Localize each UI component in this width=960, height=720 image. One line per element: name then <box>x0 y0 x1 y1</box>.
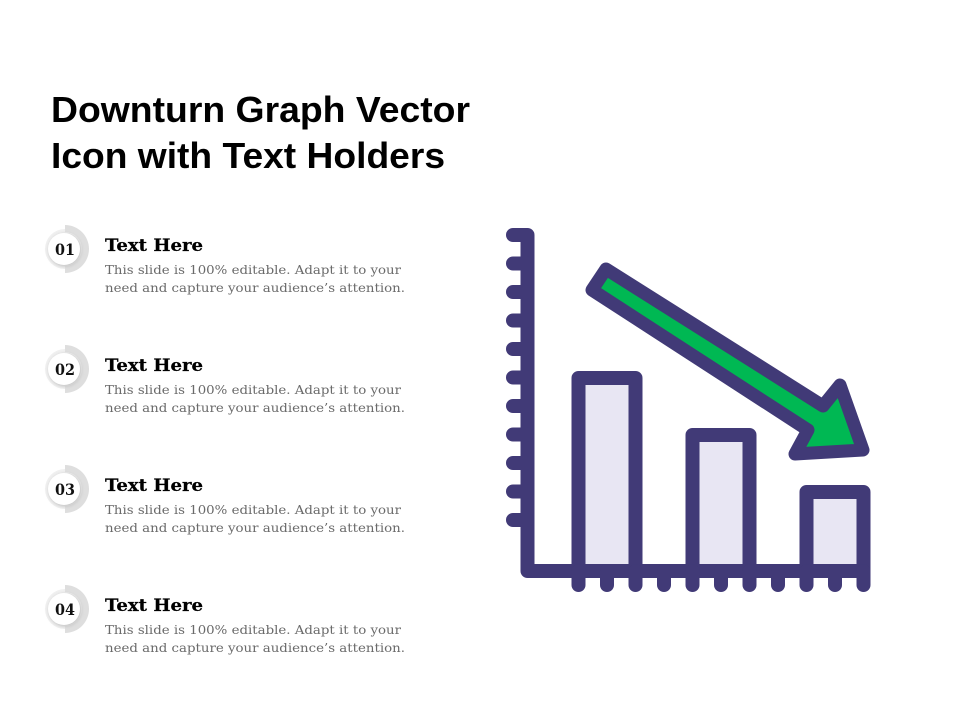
description 03: need and capture your audience’s attention. <box>105 520 405 535</box>
description 02: This slide is 100% editable. Adapt it to your <box>105 382 401 397</box>
heading 03: Text Here <box>105 476 203 496</box>
description 04: This slide is 100% editable. Adapt it to your <box>105 622 401 637</box>
badge 01 <box>45 225 89 273</box>
description 03: This slide is 100% editable. Adapt it to your <box>105 502 401 517</box>
description 02 <box>105 382 405 415</box>
axes <box>513 235 863 571</box>
downward arrow <box>592 269 863 454</box>
description 04: need and capture your audience’s attention. <box>105 640 405 655</box>
bar 3 <box>806 492 864 571</box>
description 01: need and capture your audience’s attention. <box>105 280 405 295</box>
item 04 <box>45 585 405 655</box>
item 02 <box>45 345 405 415</box>
badge 04 <box>45 585 89 633</box>
badge 02: 02 <box>55 360 75 379</box>
title: Icon with Text Holders <box>51 135 445 176</box>
heading 01: Text Here <box>105 236 203 256</box>
heading 02: Text Here <box>105 356 203 376</box>
badge 02 <box>45 345 89 393</box>
item 01 <box>45 225 405 295</box>
bar 2 <box>692 435 750 571</box>
description 04 <box>105 622 405 655</box>
badge 01: 01 <box>55 240 75 259</box>
title <box>51 89 470 176</box>
downturn graph icon <box>513 235 864 585</box>
badge 03 <box>45 465 89 513</box>
y axis ticks <box>513 264 527 520</box>
heading 04: Text Here <box>105 596 203 616</box>
title: Downturn Graph Vector <box>51 89 470 130</box>
badge 03: 03 <box>55 480 75 499</box>
description 02: need and capture your audience’s attention. <box>105 400 405 415</box>
description 01 <box>105 262 405 295</box>
x axis ticks <box>578 571 864 585</box>
badge 04: 04 <box>55 600 75 619</box>
description 03 <box>105 502 405 535</box>
description 01: This slide is 100% editable. Adapt it to your <box>105 262 401 277</box>
item 03 <box>45 465 405 535</box>
bar 1 <box>578 378 636 571</box>
